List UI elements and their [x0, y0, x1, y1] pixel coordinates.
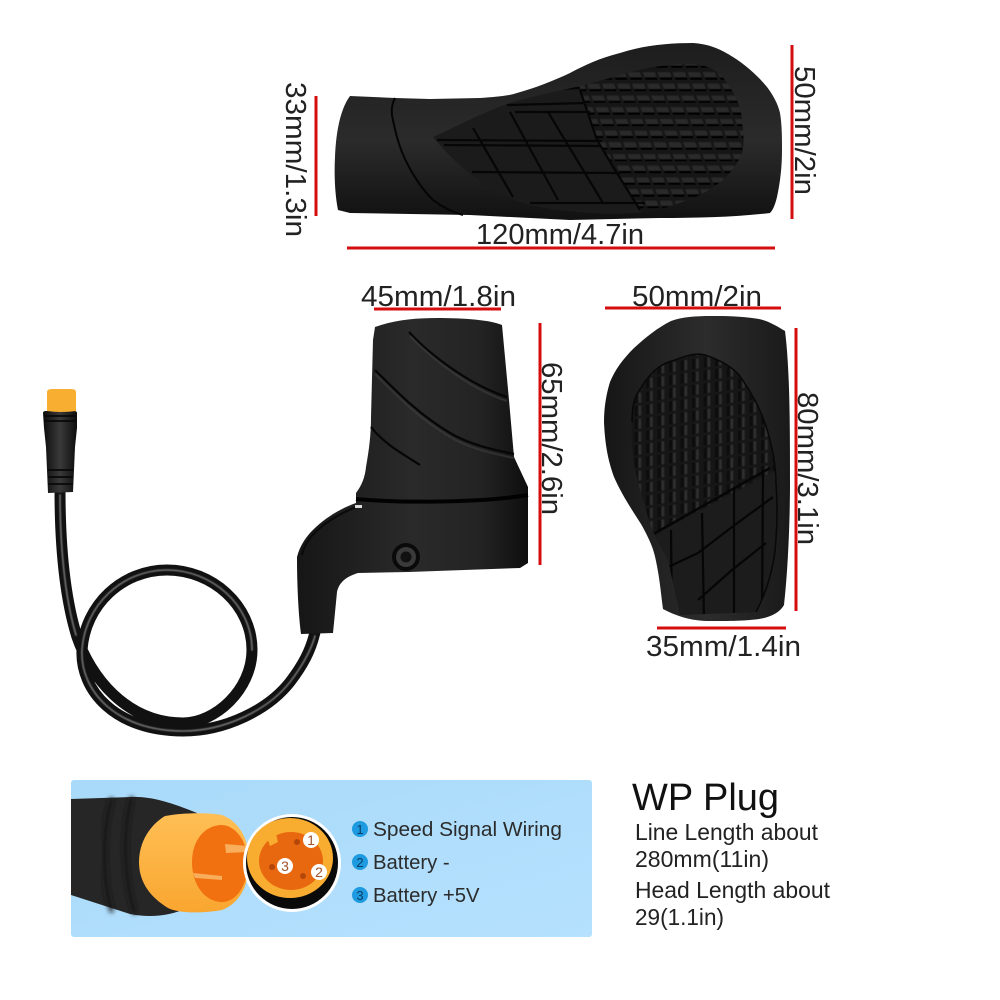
connector orange tip: [47, 389, 76, 412]
dimension: grip length: 120mm/4.7in: [476, 219, 644, 251]
grip tread: square cells and fine dots: [433, 64, 744, 210]
text: head length: 29(1.1in): [635, 904, 724, 930]
short grip tread: [634, 355, 774, 615]
plug photo: end view circle: 3: [281, 858, 289, 874]
throttle spiral grooves: [371, 332, 514, 465]
dimension: grip diameter small: 33mm/1.3in: [279, 82, 311, 237]
plug photo: orange collar: [139, 813, 249, 912]
plug photo: end view circle: 1: [307, 832, 315, 848]
dimension: throttle height: [535, 323, 567, 565]
text: head length: [635, 877, 831, 930]
connector black body: [43, 411, 77, 493]
infographic canvas: [43, 43, 830, 937]
text: head length: Head Length about: [635, 877, 831, 903]
plug photo: end view circle: 2: [315, 864, 323, 880]
dimension: throttle height: 65mm/2.6in: [535, 362, 567, 515]
plug photo: black sheath: [71, 797, 200, 916]
dimension: short grip top width: 50mm/2in: [632, 281, 762, 313]
dimension: throttle width: 45mm/1.8in: [361, 281, 516, 313]
top grip product: [335, 43, 782, 220]
dimension: short grip height: 80mm/3.1in: [791, 392, 823, 545]
legend: speed signal wiring: Speed Signal Wiring: [373, 819, 562, 841]
panel: WP plug wiring: [71, 780, 592, 937]
throttle base ring: [356, 495, 528, 502]
dimension: grip diameter large: 50mm/2in: [788, 66, 820, 195]
legend: battery plus 5V: 3: [356, 888, 364, 903]
text: line length: 280mm(11in): [635, 846, 769, 872]
legend: battery minus: 2: [356, 855, 364, 870]
dimension: short grip height: [791, 328, 823, 611]
text: line length: [635, 819, 819, 872]
twist throttle product: [297, 318, 528, 634]
legend: battery plus 5V: Battery +5V: [373, 885, 480, 907]
legend: battery minus: Battery -: [373, 852, 450, 874]
throttle hex screw: [392, 543, 420, 571]
plug photo: end view circle: [243, 814, 341, 912]
dimension: short grip bottom width: 35mm/1.4in: [646, 631, 801, 663]
text: line length: Line Length about: [635, 819, 819, 845]
heading: WP Plug: WP Plug: [632, 777, 779, 819]
short grip product: [604, 316, 790, 621]
legend: speed signal wiring: 1: [356, 822, 364, 837]
cable with connector: [43, 389, 315, 731]
dimension: grip length: [347, 219, 775, 251]
